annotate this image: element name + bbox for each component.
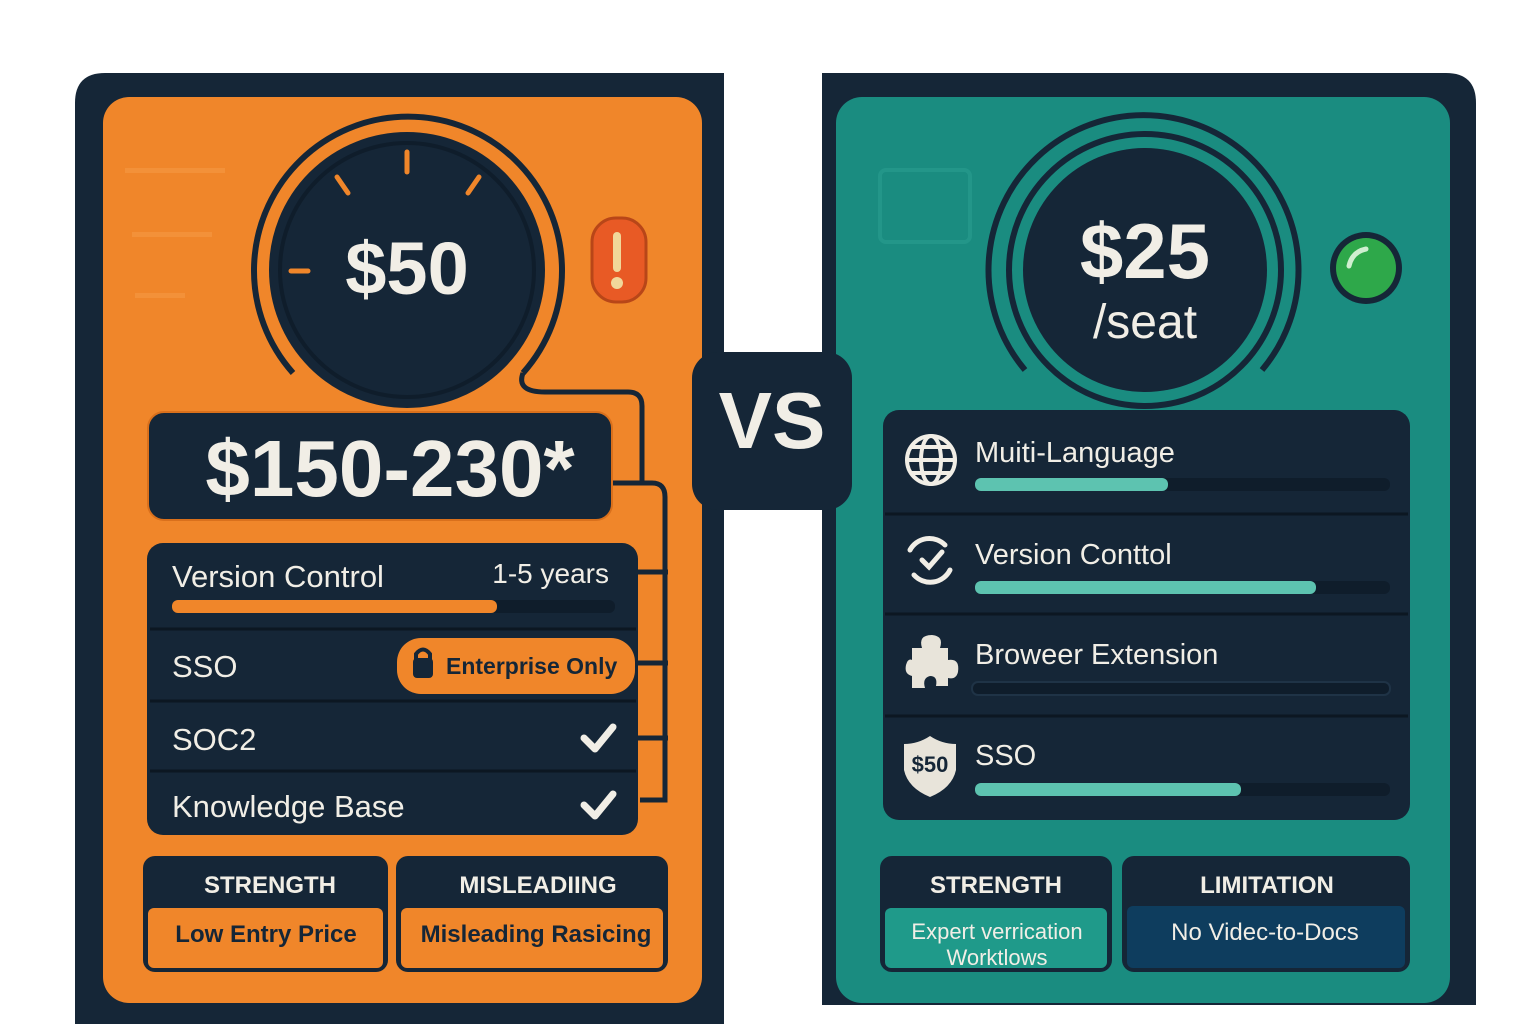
row: browser extension: Broweer Extension xyxy=(975,639,1218,671)
box: strength xyxy=(143,856,388,972)
panel: left product xyxy=(75,73,724,1024)
box: limitation xyxy=(1122,856,1410,972)
box: strength: Expert verrication xyxy=(911,919,1083,944)
badge: VS xyxy=(692,352,852,510)
row: version control: 1-5 years xyxy=(492,558,609,589)
box: limitation: No Videc-to-Docs xyxy=(1171,919,1359,946)
row: SOC2 xyxy=(172,722,613,757)
row: SSO xyxy=(904,736,1390,797)
feature list xyxy=(147,543,638,835)
row: SSO: Enterprise Only xyxy=(446,653,617,679)
row: version control: Version Conttol xyxy=(975,539,1172,571)
box: strength: STRENGTH xyxy=(930,872,1062,899)
box: strength xyxy=(880,856,1112,972)
row: knowledge base: Knowledge Base xyxy=(172,789,405,824)
box: limitation: LIMITATION xyxy=(1200,872,1334,899)
panel: right product xyxy=(822,73,1476,1005)
icon: green status dot xyxy=(1330,232,1402,304)
gauge: $25/seat: /seat xyxy=(1093,296,1197,349)
box: strength: Worktlows xyxy=(946,945,1048,970)
box: misleading xyxy=(396,856,668,972)
row: SSO: $50 xyxy=(912,752,948,777)
gauge: $25/seat xyxy=(988,115,1298,406)
box: misleading: MISLEADIING xyxy=(459,872,617,899)
feature list xyxy=(883,410,1410,820)
connector lines xyxy=(522,373,668,800)
row: knowledge base xyxy=(172,789,613,824)
gauge: $50: $50 xyxy=(345,227,469,310)
box: misleading: Misleading Rasicing xyxy=(421,921,651,948)
row: browser extension xyxy=(906,635,1390,695)
row: version control xyxy=(910,538,1390,594)
row: SSO: SSO xyxy=(172,649,237,684)
price range box: $150-230* xyxy=(205,424,575,513)
row: version control: Version Control xyxy=(172,559,384,594)
row: SSO xyxy=(172,638,635,694)
row: multi-language: Muiti-Language xyxy=(975,437,1175,469)
gauge: $25/seat: $25 xyxy=(1080,207,1210,295)
icon: alert xyxy=(592,218,646,302)
row: multi-language xyxy=(907,436,1390,491)
box: strength: Low Entry Price xyxy=(175,921,357,948)
row: version control xyxy=(172,558,615,613)
badge: VS: VS xyxy=(719,376,825,465)
row: SOC2: SOC2 xyxy=(172,722,256,757)
price range box xyxy=(148,412,612,520)
gauge: $50 xyxy=(254,117,562,410)
row: SSO: SSO xyxy=(975,740,1036,772)
box: strength: STRENGTH xyxy=(204,872,336,899)
